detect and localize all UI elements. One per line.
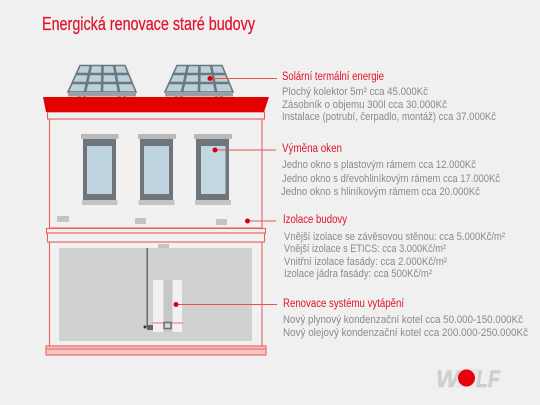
heating system [144,248,183,332]
text block: solar: Zásobník o objemu 300l cca 30.000Kč [282,99,447,111]
text block: windows: Jedno okno s hliníkovým rámem cca 20.000Kč [281,186,480,198]
leader line: solar [208,76,277,81]
icon: solar panel left [68,65,136,98]
text block: insulation: Izolace jádra fasády: cca 500Kč/m² [284,268,432,280]
window middle [138,134,176,205]
leader line: heating [174,302,277,307]
text block: insulation: Vnější izolace se závěsovou stěnou: cca 5.000Kč/m² [284,231,505,243]
window right [194,134,232,205]
text block: solar [282,71,496,123]
text block: windows: Jedno okno s plastovým rámem cca 12.000Kč [282,159,476,171]
logo: WOLF [436,366,501,393]
text block: heating [283,298,528,339]
wall vents [57,216,227,249]
text block: solar: Plochý kolektor 5m² cca 45.000Kč [282,86,428,98]
heading: insulation: Izolace budovy [283,214,347,226]
heading: solar: Solární termální energie [282,71,384,83]
text block: windows [281,143,500,198]
leader line: windows [212,148,276,152]
heading: heating: Renovace systému vytápění [283,298,405,310]
heading: windows: Výměna oken [282,143,342,155]
building illustration [43,65,277,355]
red roof [43,97,269,112]
text block: insulation: Vnější izolace s ETICS: cca 3.000Kč/m² [284,243,446,255]
logo: WOLF: W [436,366,461,393]
icon: solar panel right [165,65,233,98]
leader line: insulation [245,218,276,224]
title: Energická renovace staré budovy [42,13,256,34]
text block: windows: Jedno okno s dřevohliníkovým rámem cca 17.000Kč [282,173,500,185]
text block: insulation: Vnitřní izolace fasády: cca 2.000Kč/m² [284,256,447,268]
basement room [59,248,252,341]
logo: WOLF: LF [476,366,501,393]
text block: solar: Instalace (potrubí, čerpadlo, montáž) cca 37.000Kč [282,111,496,123]
window left [81,134,118,205]
building outline [46,112,266,355]
text block: insulation [283,214,505,280]
